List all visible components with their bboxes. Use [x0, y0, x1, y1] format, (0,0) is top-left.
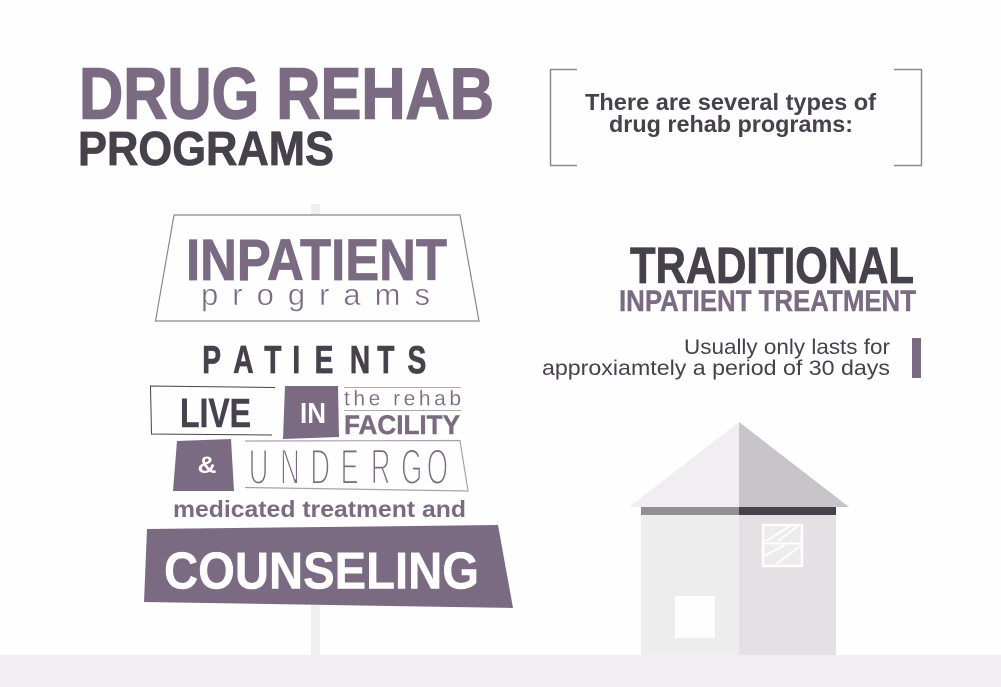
heading: traditional inpatient treatment: INPATIENT TREATMENT — [619, 285, 916, 318]
intro callout with brackets: drug rehab programs: — [609, 111, 853, 137]
banner: counseling: COUNSELING — [164, 542, 479, 600]
heading: traditional inpatient treatment: TRADITIONAL — [630, 237, 914, 294]
banner: counseling — [144, 525, 513, 608]
intro callout with brackets: There are several types of — [585, 89, 876, 115]
label: in — [283, 386, 339, 439]
label: in: IN — [300, 398, 326, 430]
text: duration description: approxiamtely a period of 30 days — [542, 357, 890, 380]
heading: traditional inpatient treatment — [619, 237, 916, 318]
label: undergo: UNDERGO — [249, 438, 448, 495]
text: medicated treatment and: medicated treatment and — [173, 496, 466, 522]
icon: house door — [675, 596, 715, 638]
intro callout with brackets — [550, 70, 922, 166]
sign: inpatient programs: INPATIENT — [186, 228, 447, 293]
title: DRUG REHAB — [79, 54, 494, 134]
text: patients: PATIENTS — [202, 339, 426, 382]
icon: house — [629, 422, 849, 655]
sign: inpatient programs — [156, 215, 479, 321]
ground — [0, 655, 1001, 687]
label: live — [150, 386, 275, 436]
icon: house window — [763, 525, 802, 566]
label: the rehab facility: the rehab — [344, 388, 461, 410]
label: the rehab facility — [344, 388, 461, 440]
text: duration description: Usually only lasts for — [684, 336, 890, 359]
signpost — [311, 204, 320, 655]
sign: inpatient programs: programs — [201, 277, 430, 312]
label: ampersand — [173, 439, 234, 491]
text: duration description — [542, 336, 890, 380]
title — [78, 54, 494, 176]
label: ampersand: & — [198, 452, 216, 479]
accent bar — [912, 338, 921, 378]
label: live: LIVE — [180, 390, 251, 436]
label: the rehab facility: FACILITY — [344, 410, 460, 440]
title: PROGRAMS — [78, 123, 334, 176]
